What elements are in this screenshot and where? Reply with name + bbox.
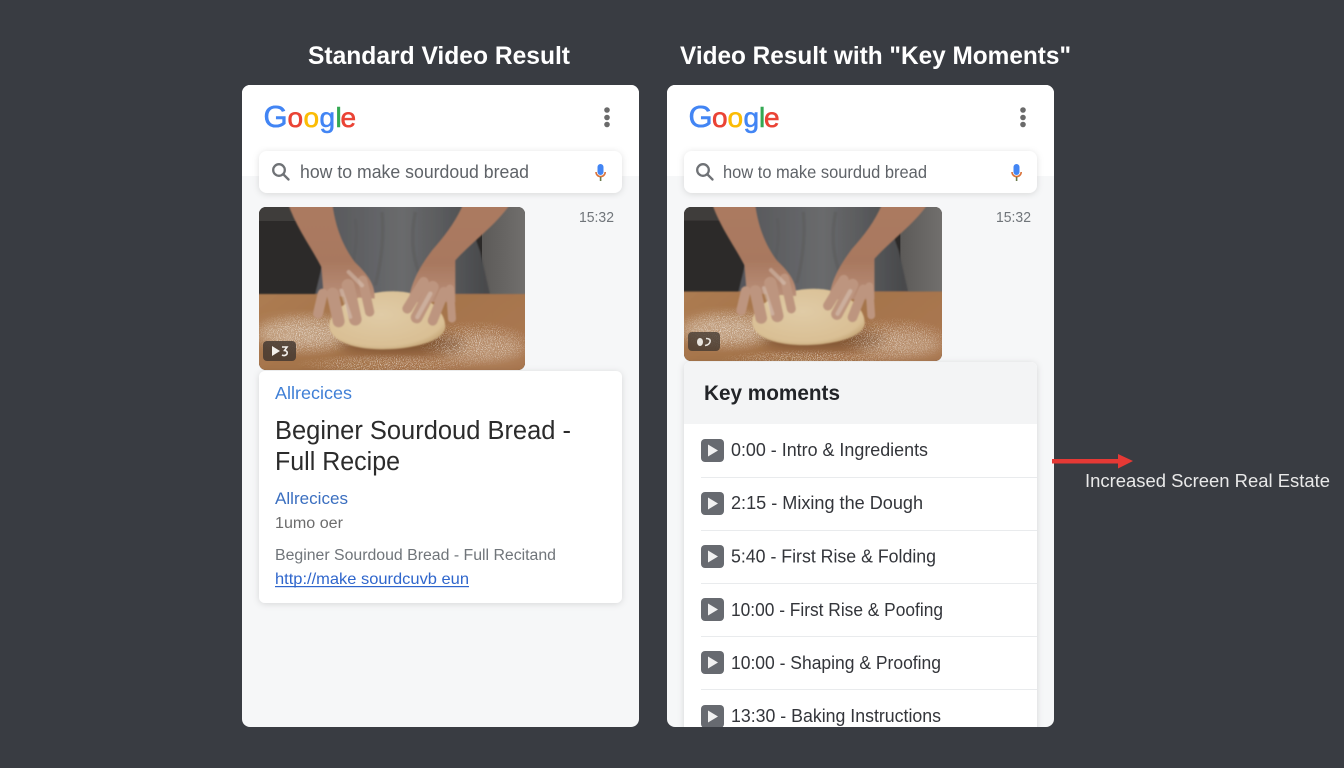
icon: menu dots <box>1020 107 1026 127</box>
panel: video result with key moments <box>667 85 1054 742</box>
search query text: how to make sourdoud bread <box>300 162 529 182</box>
logo: Google: e <box>340 102 356 133</box>
row: 10:00 first rise: 10:00 - First Rise & Poofing <box>731 600 943 620</box>
row: 13:30: 13:30 - Baking Instructions <box>731 706 941 726</box>
logo: Google: o <box>288 102 303 133</box>
icon: menu dots <box>604 107 610 127</box>
heading: standard video result: Standard Video Result <box>308 42 571 70</box>
video badge <box>263 341 296 361</box>
result title: Full Recipe <box>275 448 400 476</box>
row: 0:00: 0:00 - Intro & Ingredients <box>731 440 928 460</box>
logo: Google: o <box>728 102 743 133</box>
heading: video result with key moments: Video Result with "Key Moments" <box>680 42 1071 70</box>
result title <box>275 417 571 476</box>
row: 2:15: 2:15 - Mixing the Dough <box>731 493 923 513</box>
key moments header <box>684 362 1037 424</box>
video thumbnail: hands kneading dough <box>674 205 952 369</box>
video duration: 15:32 <box>579 210 614 226</box>
video duration: 15:32 <box>996 210 1031 226</box>
source link: Allrecices <box>275 490 348 508</box>
callout: increased screen real estate: Increased Screen Real Estate <box>1085 471 1330 491</box>
result title: Beginer Sourdoud Bread - <box>275 417 571 445</box>
logo: Google: o <box>304 102 319 133</box>
result URL: http://make sourdcuvb eun <box>275 571 469 588</box>
search query text: how to make sourdud bread <box>723 162 927 182</box>
logo: Google: l <box>759 102 765 133</box>
panel: standard video result <box>242 85 639 727</box>
source name: Allrecices <box>275 383 352 403</box>
row: 10:00 shaping: 10:00 - Shaping & Proofing <box>731 653 941 673</box>
search box <box>684 151 1037 193</box>
logo: Google: o <box>712 102 728 133</box>
logo: Google: g <box>744 102 759 133</box>
logo: Google: l <box>336 102 342 133</box>
icon: search <box>697 164 712 180</box>
logo: Google: e <box>764 102 780 133</box>
key moments card <box>684 362 1037 742</box>
arrow: increased screen real estate <box>1052 454 1133 468</box>
result card <box>259 371 622 603</box>
search box <box>259 151 622 193</box>
result description: Beginer Sourdoud Bread - Full Recitand <box>275 547 556 564</box>
logo: Google: G <box>688 99 713 134</box>
icon: search <box>273 164 288 180</box>
key moments header: Key moments <box>704 381 840 405</box>
logo: Google: G <box>264 99 288 134</box>
video thumbnail: hands kneading dough <box>259 207 525 370</box>
result age: 1umo oer <box>275 515 343 532</box>
row: 5:40: 5:40 - First Rise & Folding <box>731 546 936 566</box>
icon: microphone <box>596 164 605 181</box>
logo: Google: g <box>320 102 335 133</box>
icon: microphone <box>1012 164 1021 181</box>
video badge <box>688 332 720 351</box>
